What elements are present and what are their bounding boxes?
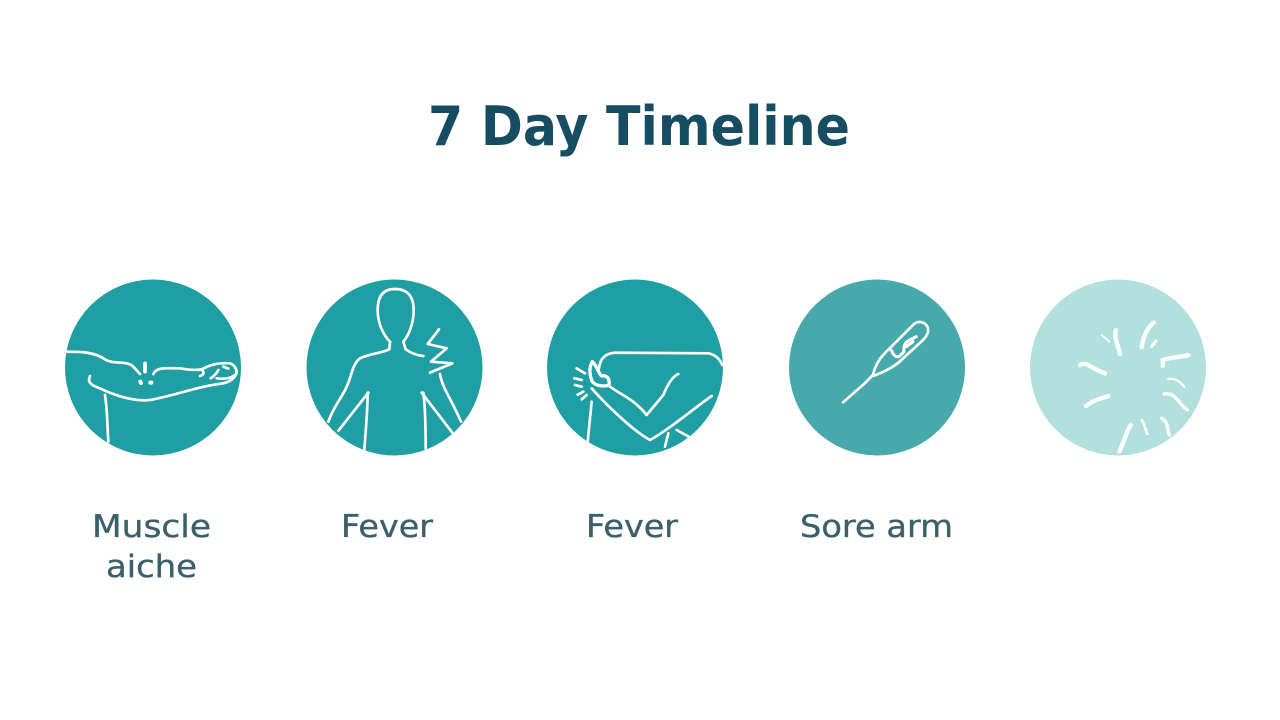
icon: upper body with shoulder pain [306, 280, 482, 456]
icon: scattered chills marks [1030, 280, 1206, 456]
label: sore arm: Sore arm [800, 509, 953, 545]
icon: muscle ache arm [65, 280, 241, 456]
label: muscle ache second line: aiche [106, 549, 197, 585]
title: 7 Day Timeline [428, 95, 850, 158]
label: muscle ache: Muscle [92, 509, 211, 545]
label: fever: Fever [341, 509, 433, 545]
icon: elbow pain [547, 280, 723, 456]
icon: thermometer [789, 280, 965, 456]
label: fever second: Fever [586, 509, 678, 545]
